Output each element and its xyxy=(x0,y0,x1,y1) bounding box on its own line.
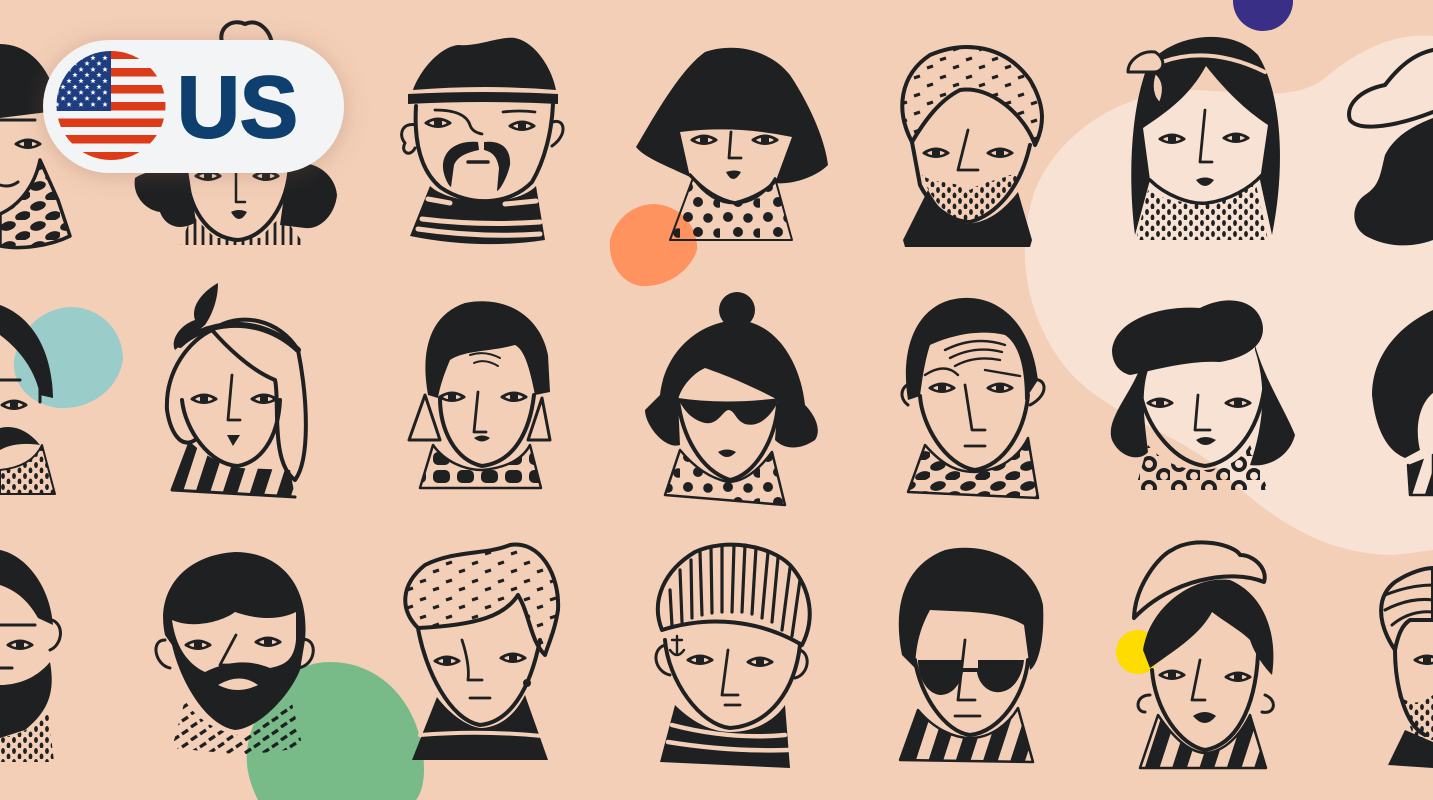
portrait: row 1 curly hair woman xyxy=(135,22,337,245)
icon: US flag xyxy=(54,51,167,161)
portrait: row 1 man with light hair and beard xyxy=(902,47,1042,247)
portrait: row 3 woman with hat and curl earrings xyxy=(1134,542,1273,768)
portrait: row 3 person with knit beanie and anchor tattoo xyxy=(656,545,810,768)
badge pill xyxy=(43,40,344,173)
portrait: row 3 man with quiff xyxy=(405,545,558,760)
decorative teal blob xyxy=(14,307,123,408)
portrait: row 1 far-left woman xyxy=(0,44,70,248)
portrait: row 1 woman with long hair and bow xyxy=(1128,37,1280,240)
portrait: row 3 man with sunglasses xyxy=(899,548,1043,762)
portrait: row 2 woman with bun and sunglasses xyxy=(645,292,818,505)
portrait: row 1 woman with hat and curls, cropped right xyxy=(1349,50,1433,245)
decorative green blob xyxy=(247,662,424,800)
badge label: US xyxy=(177,59,298,156)
decorative blue dot xyxy=(1233,0,1293,31)
portrait: row 1 woman with bob haircut xyxy=(636,48,828,240)
US badge xyxy=(43,40,344,173)
portrait: row 2 woman with headband and light hair xyxy=(167,283,306,497)
portrait: row 2 cropped right woman xyxy=(1372,310,1433,495)
portrait: row 2 woman with beret xyxy=(1111,300,1295,490)
portrait: row 2 woman with short dark hair and earrings xyxy=(409,301,550,488)
portrait: row 3 far-left bearded man xyxy=(0,550,60,762)
portrait: row 2 far-left man with moustache xyxy=(0,305,55,494)
portrait: row 2 older man with wrinkled forehead xyxy=(902,298,1044,498)
portrait: row 3 cropped right bearded man with striped hair xyxy=(1381,568,1433,768)
portrait: row 1 man with hat and moustache xyxy=(402,38,563,244)
pale background blob xyxy=(1025,35,1433,555)
portrait: row 3 bearded man with dark hair xyxy=(156,552,313,755)
decorative yellow blob xyxy=(1116,630,1160,674)
decorative orange blob xyxy=(610,204,697,286)
